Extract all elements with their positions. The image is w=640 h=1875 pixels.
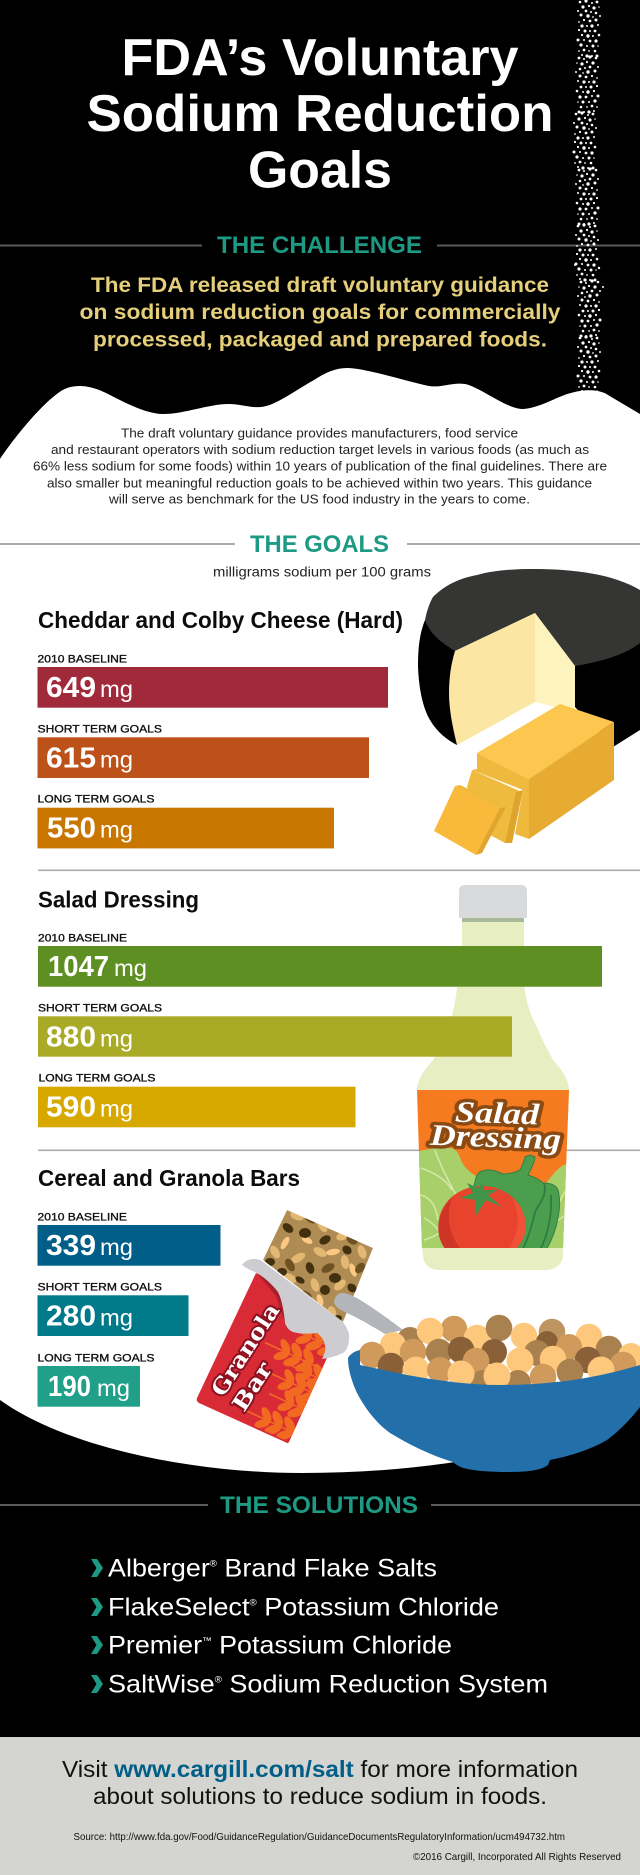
bar: salad 2010 baseline 1047 mg: 2010 BASELINE	[38, 933, 127, 945]
bar: salad 2010 baseline 1047 mg: 1047	[48, 951, 109, 983]
illustration: granola bar	[197, 1210, 373, 1452]
illustration: salad dressing bottle: Dressing	[428, 1119, 562, 1156]
item: SaltWise: SaltWise	[108, 1670, 207, 1698]
bottle label	[417, 1090, 569, 1248]
heading: the goals: THE GOALS	[250, 531, 389, 558]
item: Premier	[91, 1631, 452, 1659]
cut face left	[449, 613, 535, 745]
bar: cereal 2010 baseline 339 mg	[38, 1212, 220, 1266]
illustration: cereal bowl with spoon	[334, 1293, 640, 1472]
bar: cheddar 2010 baseline 649 mg: 649	[46, 672, 96, 704]
item: SaltWise: Sodium Reduction System	[222, 1670, 548, 1698]
item: SaltWise	[91, 1670, 548, 1698]
bar: salad 2010 baseline 1047 mg: mg	[114, 955, 147, 981]
item: SaltWise: ®	[215, 1674, 222, 1684]
call to action: about solutions to reduce sodium in foods.	[93, 1783, 547, 1809]
challenge statement	[80, 273, 561, 351]
cheese wheel top	[425, 569, 640, 666]
heading: cheddar: Cheddar and Colby Cheese (Hard)	[38, 607, 403, 633]
item: Alberger: Alberger	[108, 1555, 202, 1583]
wrapper wheat pattern	[247, 1327, 326, 1440]
granola	[263, 1210, 373, 1322]
challenge body text: 66% less sodium for some foods) within 10 years of publication of the final guidelines. There are	[33, 459, 607, 474]
challenge body text	[33, 426, 607, 507]
block top	[477, 704, 614, 779]
bar: cereal short term 280 mg: SHORT TERM GOALS	[38, 1282, 162, 1294]
item: Premier: ™	[202, 1635, 212, 1645]
title: Goals	[248, 142, 392, 200]
bar: cheddar 2010 baseline 649 mg: mg	[100, 676, 133, 702]
bar: cereal 2010 baseline 339 mg: mg	[100, 1234, 133, 1260]
pepper	[470, 1155, 560, 1250]
footer panel	[0, 1737, 640, 1875]
solutions list	[91, 1555, 548, 1698]
bar: salad short term 880 mg: mg	[100, 1025, 133, 1051]
challenge body text: and restaurant operators with sodium reduction target levels in various foods (as much as	[51, 442, 589, 457]
block right face	[529, 722, 614, 839]
item: Premier: Premier	[108, 1631, 196, 1659]
heading: the challenge: THE CHALLENGE	[217, 232, 422, 259]
cut face right	[535, 613, 575, 712]
illustration: salad dressing bottle	[415, 885, 572, 1270]
bar: salad short term 880 mg: SHORT TERM GOALS	[38, 1003, 162, 1015]
bar: cereal 2010 baseline 339 mg: 339	[46, 1230, 96, 1262]
bar: cereal long term 190 mg: mg	[97, 1375, 130, 1401]
item: Alberger: Brand Flake Salts	[217, 1555, 437, 1583]
bar: salad short term 880 mg: 880	[46, 1021, 96, 1053]
item: FlakeSelect: FlakeSelect	[108, 1594, 239, 1622]
bar: cheddar long term 550 mg: 550	[47, 813, 96, 845]
bowl	[348, 1350, 640, 1472]
call to action: Visit www.cargill.com/salt for more information	[62, 1756, 578, 1782]
bar: cereal short term 280 mg	[38, 1282, 188, 1336]
illustration: granola bar: Bar	[227, 1357, 278, 1416]
icon: falling salt stream	[572, 0, 604, 394]
item: FlakeSelect: ®	[249, 1598, 257, 1608]
tomato leaves	[460, 1183, 502, 1217]
item: FlakeSelect: Potassium Chloride	[257, 1594, 499, 1622]
item: Alberger: ®	[210, 1559, 217, 1569]
bar: cereal 2010 baseline 339 mg: 2010 BASELINE	[38, 1212, 127, 1224]
challenge statement: processed, packaged and prepared foods.	[93, 327, 547, 351]
item: Premier: Potassium Chloride	[212, 1631, 452, 1659]
heading: the solutions: THE SOLUTIONS	[220, 1492, 418, 1519]
bar: salad long term 590 mg	[38, 1073, 356, 1127]
bar: cheddar short term 615 mg: mg	[100, 746, 133, 772]
bottle cap	[459, 885, 527, 918]
foil	[242, 1259, 349, 1359]
source note: Source: http://www.fda.gov/Food/GuidanceRegulation/GuidanceDocumentsRegulatoryInformation/ucm494732.htm	[74, 1832, 565, 1843]
bar: salad long term 590 mg: LONG TERM GOALS	[38, 1073, 156, 1085]
title: Sodium Reduction	[86, 85, 554, 143]
middle slice	[467, 770, 522, 843]
title: FDA’s Voluntary	[122, 29, 519, 87]
title	[86, 29, 554, 200]
heading: cereal: Cereal and Granola Bars	[38, 1165, 300, 1191]
bar: salad long term 590 mg: mg	[100, 1096, 133, 1122]
front slice	[434, 786, 505, 855]
cereal	[359, 1315, 640, 1396]
bar: cheddar 2010 baseline 649 mg: 2010 BASELINE	[38, 654, 127, 666]
bar: cheddar long term 550 mg: mg	[100, 817, 133, 843]
wrapper lettering: Granola	[206, 1299, 285, 1401]
illustration: cheese wheel and block	[418, 569, 640, 855]
bar: cheddar long term 550 mg	[38, 794, 334, 848]
block left face	[472, 753, 529, 839]
heading: salad dressing: Salad Dressing	[38, 886, 199, 912]
item: FlakeSelect	[91, 1594, 499, 1622]
bar: cheddar short term 615 mg: 615	[46, 742, 96, 774]
label lettering: Salad	[455, 1096, 541, 1132]
copyright: ©2016 Cargill, Incorporated All Rights Reserved	[413, 1851, 621, 1863]
challenge statement: The FDA released draft voluntary guidance	[91, 273, 549, 297]
units note: milligrams sodium per 100 grams	[213, 565, 431, 580]
challenge body text: also smaller but meaningful reduction goals to be achieved within two years. This guidance	[47, 476, 592, 490]
challenge body text: The draft voluntary guidance provides manufacturers, food service	[121, 426, 518, 440]
bottle body	[417, 920, 569, 1270]
tomato	[438, 1186, 526, 1248]
bar: cereal short term 280 mg: 280	[46, 1300, 96, 1332]
call to action	[62, 1756, 578, 1809]
challenge statement: on sodium reduction goals for commercially	[80, 300, 561, 324]
bar: cereal long term 190 mg: LONG TERM GOALS	[38, 1353, 155, 1365]
bar: cereal long term 190 mg	[38, 1353, 155, 1407]
bar: salad 2010 baseline 1047 mg	[38, 933, 602, 987]
challenge body text: will serve as benchmark for the US food industry in the years to come.	[108, 492, 530, 507]
spoon	[334, 1293, 403, 1334]
label vegetables	[418, 1148, 566, 1248]
bar: salad long term 590 mg: 590	[46, 1092, 96, 1124]
white plate background with salt mound	[0, 368, 640, 1473]
bar: cheddar long term 550 mg: LONG TERM GOALS	[38, 794, 155, 806]
wrapper	[197, 1273, 345, 1443]
cheese wheel rind	[418, 620, 640, 747]
bar: cheddar short term 615 mg: SHORT TERM GOALS	[38, 724, 162, 736]
bar: cereal long term 190 mg: 190	[48, 1371, 91, 1403]
item: Alberger	[91, 1555, 437, 1583]
bar: cheddar short term 615 mg	[38, 724, 369, 778]
bar: cereal short term 280 mg: mg	[100, 1304, 133, 1330]
bar: salad short term 880 mg	[38, 1003, 512, 1057]
bar: cheddar 2010 baseline 649 mg	[38, 654, 388, 708]
